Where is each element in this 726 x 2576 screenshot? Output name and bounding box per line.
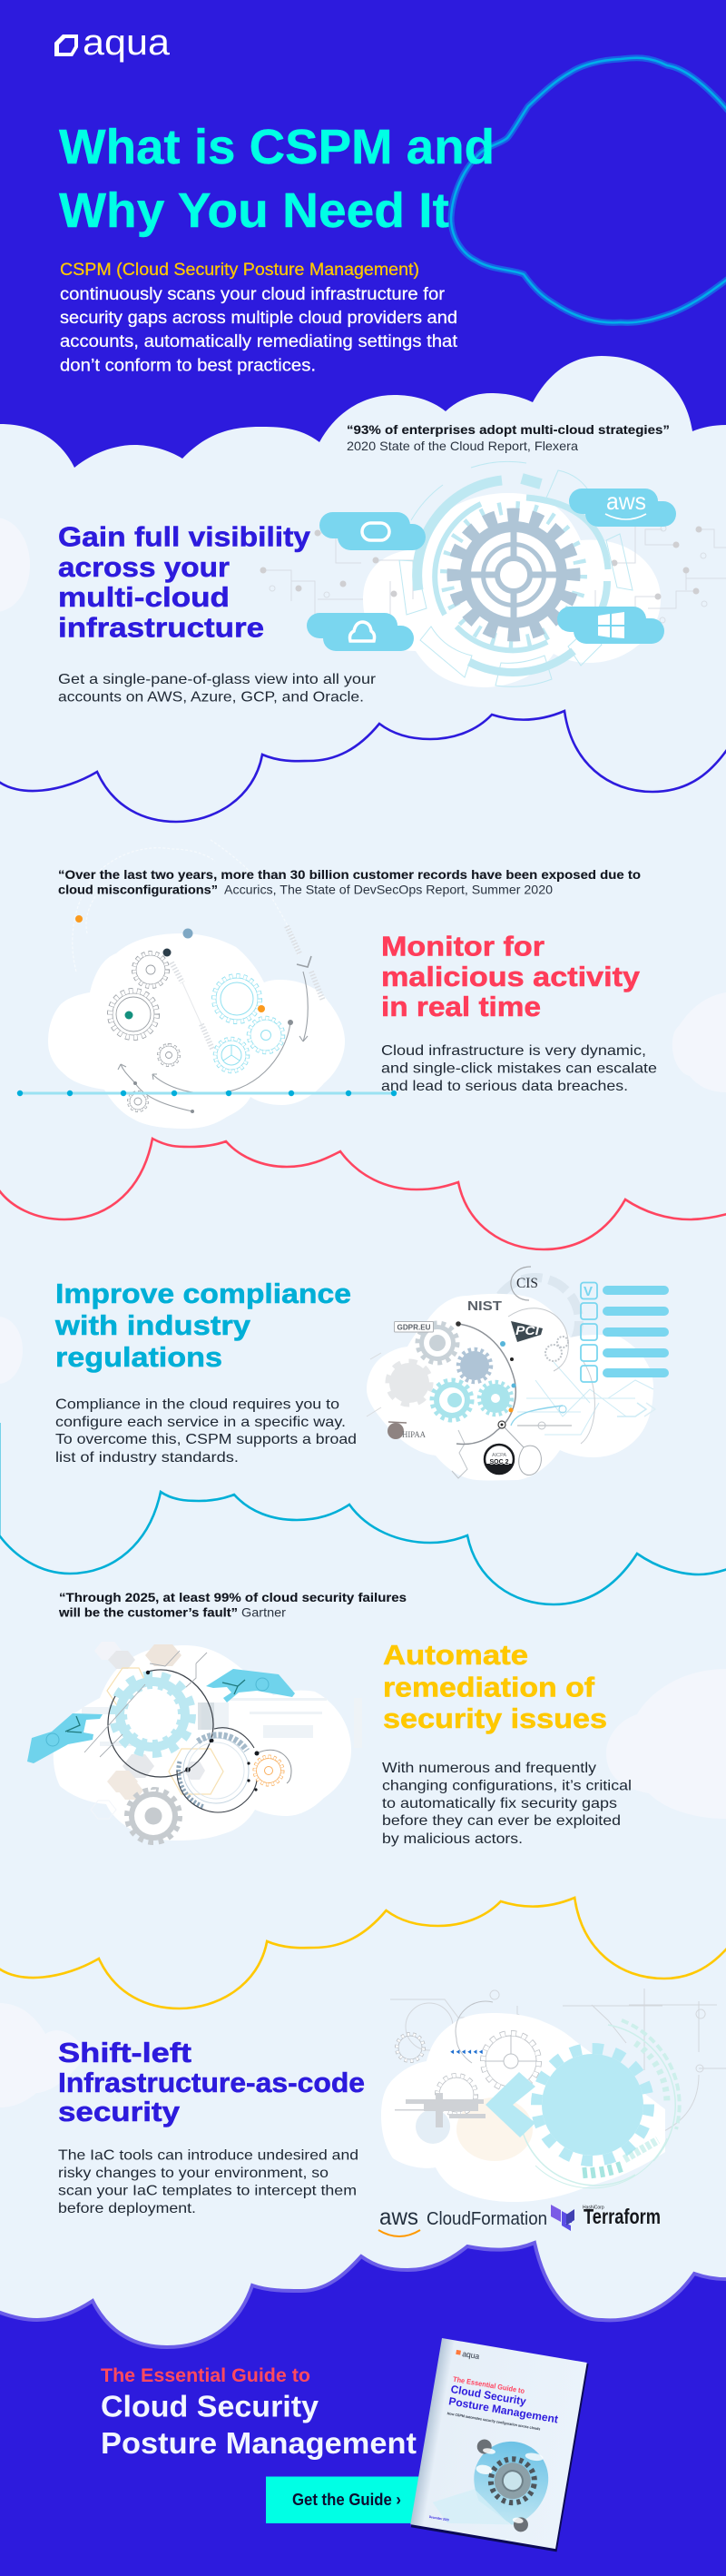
heading: shift-left: security <box>58 2096 181 2127</box>
gear: cyan with chevron <box>486 2048 649 2161</box>
book cover: Posture Management <box>447 2394 559 2425</box>
icon: Terraform <box>551 2205 574 2231</box>
section 2: monitoring <box>17 840 657 1129</box>
faint dial behind cloud <box>492 1278 579 1365</box>
title: What is CSPM and <box>59 120 495 174</box>
footer text: Cloud Security <box>101 2390 319 2423</box>
icon: right robot hand <box>206 1669 295 1703</box>
body text <box>58 672 377 705</box>
faint circuit blocks <box>82 1698 362 1748</box>
light cyan arcs <box>417 479 608 672</box>
heading: compliance: regulations <box>55 1341 222 1373</box>
gear: teal ring <box>432 1380 472 1420</box>
blue chevrons: ◄◄◄◄◄◄ <box>449 2048 484 2056</box>
quote: customer's fault: Gartner <box>241 1605 286 1620</box>
body text: configure each service in a specific way. <box>55 1415 346 1430</box>
outline gears <box>397 2001 539 2114</box>
logos <box>378 2205 661 2236</box>
thin arc outlines <box>399 461 633 686</box>
logo: CIS <box>511 1267 538 1300</box>
yellow cloud divider <box>0 1898 726 2008</box>
book cover: How CSPM automates security configuration across clouds <box>446 2411 541 2432</box>
intro paragraph: CSPM (Cloud Security Posture Management) <box>60 261 419 280</box>
body text: and single-click mistakes can escalate <box>381 1061 657 1077</box>
body text: before deployment. <box>58 2201 196 2216</box>
book cover: aqua <box>462 2349 480 2361</box>
icon: left robot hand <box>27 1713 103 1763</box>
heading: gain full visibility: Gain full visibility <box>58 521 311 552</box>
body text <box>382 1761 632 1847</box>
quote: customer's fault: will be the customer’s fault” <box>58 1605 238 1620</box>
faint orbit arcs <box>73 840 299 972</box>
checklist: V <box>584 1284 593 1299</box>
body text: scan your IaC templates to intercept them <box>58 2183 357 2199</box>
white cloud backdrop <box>363 493 661 687</box>
body text <box>381 1043 657 1094</box>
red cloud divider <box>0 1139 726 1249</box>
body text <box>55 1397 357 1466</box>
icon: Windows cloud <box>557 607 664 644</box>
body text: by malicious actors. <box>382 1831 523 1847</box>
heading: monitor: malicious activity <box>381 961 641 992</box>
peach glow <box>456 2097 533 2161</box>
logo: AWS: aws <box>379 2205 418 2230</box>
aqua logo: aqua <box>83 23 171 63</box>
footer text: Posture Management <box>101 2426 417 2460</box>
icon: AWS cloud <box>569 488 676 527</box>
white cloud backdrop <box>381 2013 665 2202</box>
icon: Oracle cloud <box>319 512 426 550</box>
body text: The IaC tools can introduce undesired and <box>58 2148 358 2163</box>
intro paragraph: don’t conform to best practices. <box>60 356 316 376</box>
heading: monitor <box>381 930 641 1022</box>
button: get the guide <box>266 2477 425 2523</box>
chevron trails <box>172 926 323 1049</box>
intro paragraph: accounts, automatically remediating settings that <box>60 332 458 351</box>
heading: shift-left: Shift-left <box>58 2037 191 2068</box>
body text: Compliance in the cloud requires you to <box>55 1397 339 1413</box>
section 4: automation <box>27 1590 632 1847</box>
top circuit traces <box>390 1989 726 2143</box>
arc connector with nodes <box>456 1321 515 1444</box>
dark ring <box>108 1670 213 1777</box>
arrows <box>118 956 311 1111</box>
hero: top blue cloud banner <box>0 0 726 468</box>
illustration: infrastructure-as-code gear <box>378 1989 726 2236</box>
white cloud backdrop <box>48 933 345 1129</box>
gear: blue <box>458 1349 491 1382</box>
teal rings <box>522 2020 680 2188</box>
body text: list of industry standards. <box>55 1450 239 1466</box>
quote: multi-cloud <box>347 422 670 453</box>
colored dots <box>75 915 83 923</box>
body text <box>58 2148 358 2216</box>
quote: misconfigurations: Accurics, The State of DevSecOps Report, Summer 2020 <box>224 883 553 897</box>
heading: monitor: in real time <box>381 991 541 1022</box>
logo text: CloudFormation: CloudFormation <box>427 2209 547 2229</box>
heading: monitor: Monitor for <box>381 930 544 962</box>
title: Why You Need It <box>59 183 449 238</box>
hero blue background <box>0 0 726 468</box>
body text: accounts on AWS, Azure, GCP, and Oracle. <box>58 690 364 705</box>
logo: NIST: NIST <box>467 1299 502 1314</box>
gray outline gears <box>110 953 180 1111</box>
heading: automate <box>383 1639 607 1734</box>
quote: misconfigurations <box>58 867 641 897</box>
heading: shift-left: Infrastructure-as-code <box>58 2067 365 2098</box>
light circuit traces <box>517 1362 655 1435</box>
tech ring <box>177 1728 257 1812</box>
heading: automate: Automate <box>383 1639 528 1671</box>
heading: compliance: Improve compliance <box>55 1278 351 1309</box>
intro paragraph: security gaps across multiple cloud providers and <box>60 309 457 328</box>
quote: customer's fault <box>58 1590 407 1620</box>
body text: changing configurations, it’s critical <box>382 1778 632 1794</box>
logo: HIPAA <box>388 1422 426 1440</box>
body text: before they can ever be exploited <box>382 1813 621 1829</box>
quote: misconfigurations: “Over the last two years, more than 30 billion customer records have been exposed due to <box>58 867 641 882</box>
body text: To overcome this, CSPM supports a broad <box>55 1432 357 1447</box>
illustration: robot hands and gears <box>27 1642 362 1842</box>
footer: call to action <box>0 2243 726 2576</box>
book cover <box>410 2338 589 2551</box>
heading: compliance <box>54 1278 351 1373</box>
heading: automate: security issues <box>383 1703 607 1734</box>
illustration: gears and arrows <box>17 840 397 1129</box>
logo text: Terraform: Terraform <box>584 2205 661 2228</box>
logo: PCI: PCI <box>515 1323 540 1337</box>
logo: CIS: CIS <box>516 1276 538 1291</box>
logo: SOC 2: AICPA <box>492 1453 506 1458</box>
logo: SOC 2 <box>485 1445 514 1474</box>
heading: gain full visibility: multi-cloud <box>58 581 230 613</box>
gray circuit blocks <box>395 2093 486 2127</box>
section 5: shift-left <box>58 1989 726 2236</box>
logo: HIPAA: HIPAA <box>402 1431 426 1440</box>
heading: gain full visibility: infrastructure <box>58 612 264 643</box>
white cloud backdrop <box>367 1294 653 1480</box>
body text: risky changes to your environment, so <box>58 2166 329 2181</box>
body text: to automatically fix security gaps <box>382 1796 617 1811</box>
cyan gear <box>113 1674 192 1754</box>
intro paragraph: continuously scans your cloud infrastructure for <box>60 285 446 304</box>
orange gear <box>254 1750 291 1785</box>
quote: multi-cloud: “93% of enterprises adopt multi-cloud strategies” <box>347 422 670 437</box>
book cover: December 2020 <box>429 2515 449 2522</box>
body text: and lead to serious data breaches. <box>381 1079 628 1094</box>
teal cloud divider <box>0 1423 726 1604</box>
section 1: visibility <box>58 422 726 705</box>
heading: compliance: with industry <box>54 1309 251 1341</box>
icon: Google Cloud <box>307 613 414 651</box>
quote: multi-cloud: 2020 State of the Cloud Report, Flexera <box>347 439 578 453</box>
footer text: The Essential Guide to <box>101 2365 310 2386</box>
gray gear <box>127 1790 180 1842</box>
cyan outline gears <box>214 975 283 1071</box>
gear: gray <box>417 1323 457 1363</box>
illustration: gear with cloud providers <box>260 461 726 687</box>
logo: PCI <box>511 1321 543 1342</box>
icon: AWS cloud: aws <box>606 488 646 515</box>
book cover: Cloud Security <box>450 2383 527 2408</box>
quote: customer's fault: “Through 2025, at least 99% of cloud security failures <box>59 1590 407 1604</box>
blue cloud divider <box>0 711 726 822</box>
central gear <box>454 515 574 635</box>
button: get the guide: Get the Guide › <box>292 2491 401 2509</box>
logo: SOC 2: SOC 2 <box>489 1459 509 1466</box>
logo: GDPR.EU: GDPR.EU <box>397 1322 430 1331</box>
heading: gain full visibility: across your <box>58 551 230 583</box>
ticks <box>582 2161 623 2178</box>
faint background clouds <box>0 518 726 2107</box>
quote: misconfigurations: cloud misconfigurations” <box>58 883 218 897</box>
heading: shift-left <box>58 2037 365 2127</box>
book cover: The Essential Guide to <box>452 2375 525 2395</box>
gear: light gray <box>388 1361 431 1405</box>
heading: gain full visibility <box>58 521 311 643</box>
illustration: compliance standards <box>367 1267 669 1480</box>
logo text: Terraform: HashiCorp <box>583 2205 604 2210</box>
checklist <box>581 1282 669 1382</box>
footer blue cloud background <box>0 2243 726 2576</box>
aqua logo <box>54 23 171 63</box>
hexagon cluster <box>91 1642 223 1819</box>
title <box>59 120 495 238</box>
thin connector lines <box>84 1651 207 1757</box>
body text: Cloud infrastructure is very dynamic, <box>381 1043 646 1059</box>
gear: teal hub <box>479 1382 512 1415</box>
circuit traces <box>263 518 726 636</box>
body text: With numerous and frequently <box>382 1761 596 1776</box>
body text: Get a single-pane-of-glass view into all your <box>58 672 377 687</box>
heading: automate: remediation of <box>383 1671 595 1703</box>
neon cloud outline <box>451 58 726 322</box>
timeline <box>17 1091 397 1096</box>
footer text <box>101 2365 417 2460</box>
section 3: compliance <box>54 1267 669 1480</box>
white cloud backdrop <box>54 1645 351 1841</box>
intro paragraph <box>60 261 458 376</box>
